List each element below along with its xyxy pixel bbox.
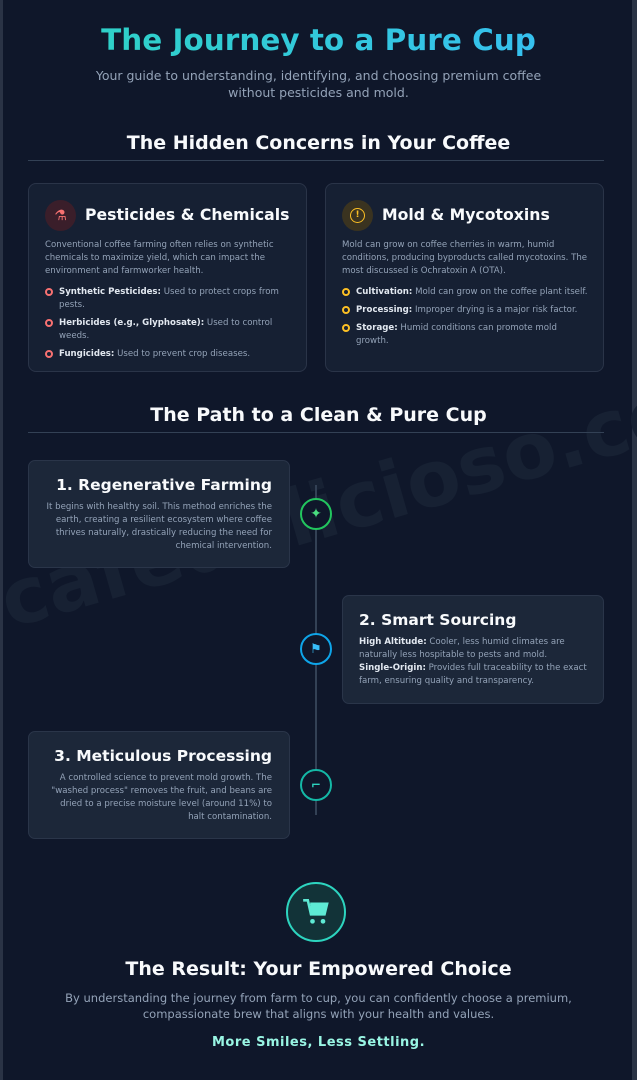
text: Mold can grow on coffee cherries in warm, humid conditions, producing byproducts called mycotoxins. The most discussed is Ochratoxin A (OTA). (342, 240, 587, 276)
heading: hidden concerns: The Hidden Concerns in Your Coffee (127, 132, 510, 154)
tagline: More Smiles, Less Settling. (212, 1035, 425, 1050)
step 3 card: 3. Meticulous Processing (54, 747, 272, 765)
icon: process (300, 769, 332, 801)
subtitle (96, 68, 541, 100)
icon: flag (300, 633, 332, 665)
step 1 card (28, 460, 290, 568)
icon: process: ⌐ (311, 778, 321, 792)
step 3 card: A controlled science to prevent mold growth. The "washed process" removes the fruit, and beans are dried to a precise moisture level (around 11%) to halt contamination. (51, 773, 272, 822)
text: Herbicides (e.g., Glyphosate): Used to control weeds. (59, 318, 272, 341)
icon: warning (342, 200, 373, 231)
text: Storage: Humid conditions can promote mold growth. (356, 323, 557, 346)
icon: sparkle: ✦ (310, 506, 322, 522)
heading: result: The Result: Your Empowered Choice (125, 958, 512, 980)
text: Conventional coffee farming often relies on synthetic chemicals to maximize yield, which can impact the environment and farmworker health. (45, 240, 274, 276)
timeline line (315, 485, 317, 815)
text: Cultivation: Mold can grow on the coffee plant itself. (356, 287, 588, 297)
step 2 card: High Altitude: Cooler, less humid climates are naturally less hospitable to pests and mold. (359, 637, 565, 660)
icon: pesticide (45, 200, 76, 231)
text: Fungicides: Used to prevent crop diseases. (59, 349, 250, 359)
text: Processing: Improper drying is a major risk factor. (356, 305, 577, 315)
result text: By understanding the journey from farm to cup, you can confidently choose a premium, (65, 991, 572, 1005)
result text: compassionate brew that aligns with your health and values. (143, 1007, 494, 1021)
subtitle: without pesticides and mold. (228, 85, 409, 100)
result text (65, 991, 572, 1021)
step 2 card (342, 595, 604, 704)
step 3 card (28, 731, 290, 839)
step 1 card: It begins with healthy soil. This method enriches the earth, creating a resilient ecosystem where coffee thrives naturally, drastically reducing the need for chemical intervention. (47, 502, 272, 551)
subtitle: Your guide to understanding, identifying, and choosing premium coffee (96, 68, 541, 83)
heading: path: The Path to a Clean & Pure Cup (150, 404, 487, 426)
step 2 card: 2. Smart Sourcing (359, 611, 516, 629)
panel: mold (325, 183, 604, 372)
icon: flag: ⚑ (310, 642, 322, 656)
title: The Journey to a Pure Cup (101, 23, 536, 57)
heading: Mold & Mycotoxins (382, 205, 550, 224)
icon: cart (286, 882, 346, 942)
text (45, 240, 279, 359)
panel: pesticides (28, 183, 307, 372)
step 2 card: Single-Origin: Provides full traceability to the exact farm, ensuring quality and transparency. (359, 663, 587, 686)
heading: Pesticides & Chemicals (85, 205, 289, 224)
text: Synthetic Pesticides: Used to protect crops from pests. (59, 287, 279, 310)
step 1 card: 1. Regenerative Farming (56, 476, 272, 494)
icon: pesticide: ⚗ (54, 208, 67, 224)
icon: warning: ! (355, 210, 360, 220)
text (342, 240, 588, 346)
title (0, 23, 637, 57)
icon: sparkle (300, 498, 332, 530)
